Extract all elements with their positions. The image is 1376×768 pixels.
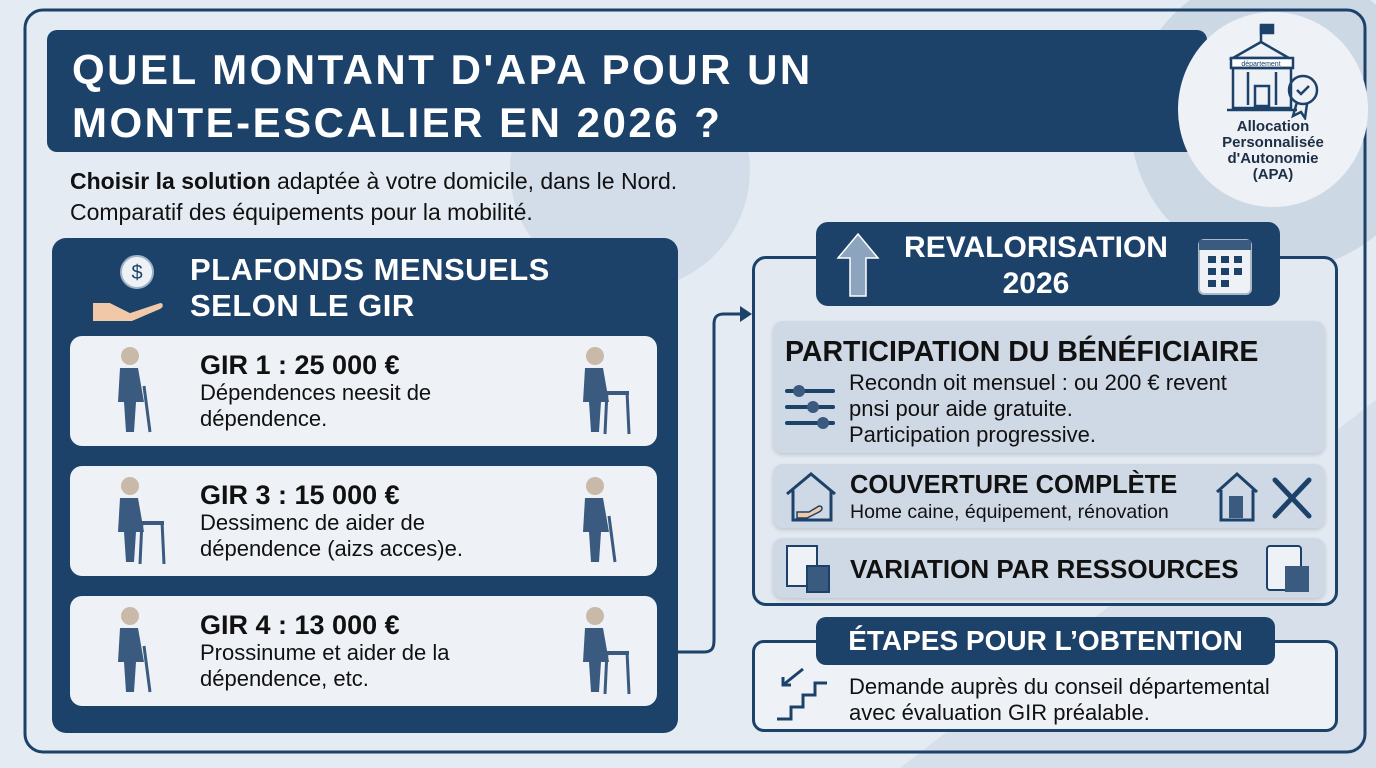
panel: etapes — [752, 640, 1338, 732]
header: revalorisation: REVALORISATION — [904, 231, 1168, 264]
icon: money hand — [93, 255, 163, 321]
header: etapes: ÉTAPES POUR L’OBTENTION — [848, 625, 1243, 656]
badge: APA: Allocation — [1237, 118, 1309, 135]
title banner — [47, 30, 1207, 152]
card: GIR 1: Dépendences neesit de — [200, 380, 431, 405]
heading: PLAFONDS MENSUELS — [190, 252, 550, 287]
title banner: MONTE-ESCALIER EN 2026 ? — [72, 99, 722, 146]
box: participation: Recondn oit mensuel : ou 200 € revent — [849, 370, 1227, 395]
icon: stairs — [777, 668, 827, 720]
box: variation: VARIATION PAR RESSOURCES — [850, 554, 1239, 584]
header: etapes — [816, 617, 1275, 665]
card: GIR 3 — [70, 466, 657, 576]
panel: plafonds mensuels — [52, 238, 678, 733]
header: revalorisation: 2026 — [1003, 267, 1069, 300]
card: GIR 1 — [70, 336, 657, 446]
icon: department building — [1227, 24, 1318, 120]
card: GIR 1: GIR 1 : 25 000 € — [200, 350, 400, 380]
box: couverture: COUVERTURE COMPLÈTE — [850, 471, 1177, 499]
icon: money hand: $ — [131, 262, 143, 284]
box: participation: pnsi pour aide gratuite. — [849, 396, 1073, 421]
subtitle: Comparatif des équipements pour la mobilité. — [70, 199, 533, 225]
badge: APA: Personnalisée — [1222, 134, 1324, 151]
badge: APA — [1178, 12, 1368, 207]
card: GIR 3: Dessimenc de aider de — [200, 510, 425, 535]
icon: department building: département — [1241, 61, 1281, 68]
box: couverture: Home caine, équipement, rénovation — [850, 501, 1169, 523]
box: participation — [773, 321, 1325, 453]
card: GIR 4: Prossinume et aider de la — [200, 640, 449, 665]
icon: calendar — [1198, 239, 1252, 295]
arrow: connector — [678, 306, 752, 654]
heading: SELON LE GIR — [190, 288, 415, 323]
box: couverture — [773, 464, 1325, 528]
icon: up arrow — [836, 233, 880, 297]
panel: revalorisation — [752, 256, 1338, 606]
card: GIR 4: dépendence, etc. — [200, 666, 369, 691]
card: GIR 4: GIR 4 : 13 000 € — [200, 610, 400, 640]
box: participation: PARTICIPATION DU BÉNÉFICIAIRE — [785, 336, 1258, 368]
panel: etapes: Demande auprès du conseil départemental — [849, 674, 1270, 699]
subtitle: Choisir la solution adaptée à votre domicile, dans le Nord. — [70, 168, 677, 194]
header: revalorisation — [816, 222, 1280, 306]
card: GIR 3: dépendence (aizs acces)e. — [200, 536, 463, 561]
title banner: QUEL MONTANT D'APA POUR UN — [72, 46, 813, 93]
box: variation — [773, 538, 1325, 598]
card: GIR 3: GIR 3 : 15 000 € — [200, 480, 400, 510]
badge: APA: d'Autonomie — [1227, 150, 1319, 167]
card: GIR 4 — [70, 596, 657, 706]
box: participation: Participation progressive. — [849, 422, 1096, 447]
card: GIR 1: dépendence. — [200, 406, 327, 431]
badge: APA: (APA) — [1253, 166, 1293, 183]
panel: etapes: avec évaluation GIR préalable. — [849, 700, 1150, 725]
heading — [190, 252, 550, 323]
subtitle — [70, 168, 677, 225]
